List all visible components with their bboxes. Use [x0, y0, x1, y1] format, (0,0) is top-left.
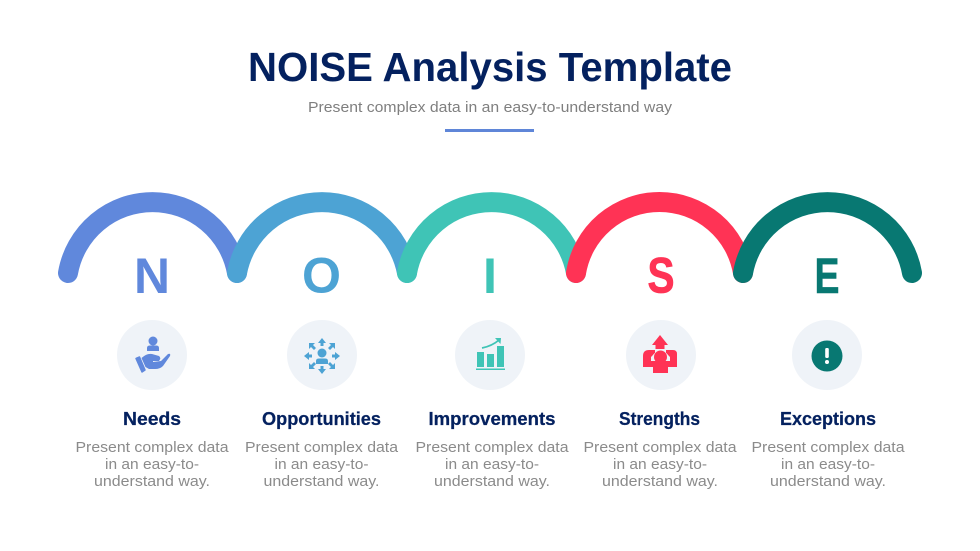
description: opportunities: understand way. [264, 473, 380, 490]
icon: opportunities, person with arrows [287, 320, 357, 390]
description: exceptions: understand way. [770, 473, 886, 490]
description: opportunities [245, 439, 399, 490]
arc I [407, 202, 576, 273]
description: needs: Present complex data [76, 439, 229, 456]
heading: strengths: Strengths [619, 409, 700, 429]
column: improvements [416, 409, 569, 490]
description: needs: understand way. [94, 473, 210, 490]
letter I: I [483, 248, 497, 304]
letter N: N [134, 248, 170, 304]
description: strengths: understand way. [602, 473, 718, 490]
arc S [576, 202, 743, 273]
description: exceptions: in an easy-to- [781, 456, 875, 473]
description: improvements: in an easy-to- [445, 456, 539, 473]
description: exceptions [752, 439, 905, 490]
column: opportunities [245, 409, 399, 490]
description: exceptions: Present complex data [752, 439, 905, 456]
description: needs: in an easy-to- [105, 456, 199, 473]
description: improvements: Present complex data [416, 439, 569, 456]
description: strengths: Present complex data [584, 439, 737, 456]
column: strengths [584, 409, 737, 490]
column: needs [76, 409, 229, 490]
accent bar [445, 129, 534, 132]
heading: exceptions: Exceptions [780, 409, 876, 429]
icon: exceptions, exclamation badge [792, 320, 862, 390]
letter S: S [648, 248, 674, 304]
icon: improvements, rising bar chart [455, 320, 525, 390]
arc chain [68, 202, 912, 273]
icon: needs, hand holding person [117, 320, 187, 390]
heading: improvements: Improvements [428, 409, 556, 429]
heading: opportunities: Opportunities [262, 409, 381, 429]
title: NOISE Analysis Template [248, 44, 732, 90]
description: opportunities: in an easy-to- [274, 456, 368, 473]
description: opportunities: Present complex data [245, 439, 399, 456]
letter O: O [302, 248, 341, 304]
description: improvements [416, 439, 569, 490]
description: improvements: understand way. [434, 473, 550, 490]
arc N [68, 202, 237, 273]
subtitle: Present complex data in an easy-to-understand way [308, 99, 673, 116]
arc E [743, 202, 912, 273]
description: strengths: in an easy-to- [613, 456, 707, 473]
description: needs [76, 439, 229, 490]
icon: strengths, person lifting arrow [626, 320, 696, 390]
description: strengths [584, 439, 737, 490]
column: exceptions [752, 409, 905, 490]
arc O [237, 202, 407, 273]
letter E: E [814, 248, 840, 304]
heading: needs: Needs [123, 409, 181, 429]
